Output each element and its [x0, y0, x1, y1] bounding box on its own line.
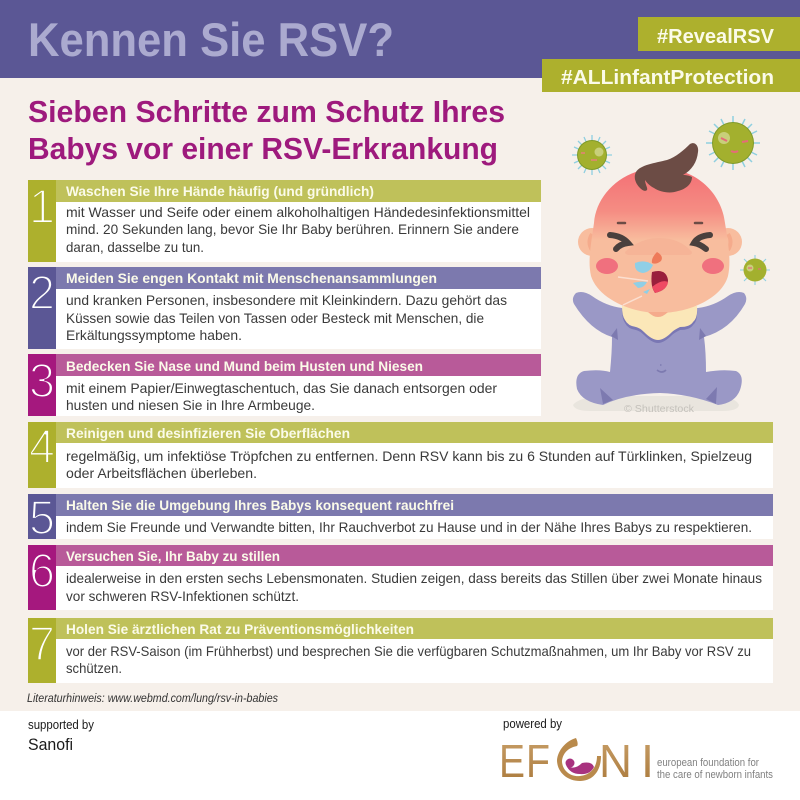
step 7: 7	[29, 618, 55, 671]
step 1: daran, dasselbe zu tun.	[66, 239, 204, 255]
step 2: Küssen sowie das Teilen von Tassen oder Besteck mit Menschen, die	[66, 310, 484, 326]
header band	[0, 0, 800, 78]
heading	[28, 94, 505, 166]
step 6: vor schweren RSV-Infektionen schützt.	[66, 588, 299, 604]
watermark: © Shutterstock	[624, 404, 695, 415]
step 3: mit einem Papier/Einwegtaschentuch, das Sie danach entsorgen oder	[66, 380, 497, 396]
step 5: indem Sie Freunde und Verwandte bitten, Ihr Rauchverbot zu Hause und in der Nähe Ihres Babys zu respektieren.	[66, 519, 752, 535]
collar	[622, 309, 697, 343]
EFCNI logo	[499, 735, 773, 787]
step 1: mit Wasser und Seife oder einem alkoholhaltigen Händedesinfektionsmittel	[66, 204, 530, 220]
step 2: 2	[29, 267, 55, 320]
hashtag: RevealRSV	[638, 17, 800, 51]
step 6: Versuchen Sie, Ihr Baby zu stillen	[66, 548, 280, 564]
step 6: idealerweise in den ersten sechs Lebensmonaten. Studien zeigen, dass bereits das Stillen über zwei Monate hinaus	[66, 570, 762, 586]
eyes	[610, 235, 628, 249]
arms and body	[573, 292, 746, 405]
head	[590, 168, 729, 313]
EFCNI logo: F	[526, 735, 550, 787]
nose	[652, 252, 662, 264]
step 6: 6	[29, 545, 55, 598]
step 4: regelmäßig, um infektiöse Tröpfchen zu entfernen. Denn RSV kann bis zu 6 Stunden auf Türklinken, Spielzeug	[66, 448, 752, 464]
supported by Sanofi: supported by	[28, 718, 95, 732]
EFCNI logo: I	[641, 735, 654, 787]
hashtag: ALLinfantProtection	[542, 59, 800, 92]
hashtag: ALLinfantProtection: #ALLinfantProtection	[561, 67, 774, 89]
hair	[635, 143, 698, 192]
step 5: 5	[29, 492, 55, 545]
supported by Sanofi	[28, 718, 95, 754]
mucus	[635, 261, 653, 273]
step 1: mind. 20 Sekunden lang, bevor Sie Ihr Baby berühren. Erinnern Sie andere	[66, 221, 519, 237]
step 5: Halten Sie die Umgebung Ihres Babys konsequent rauchfrei	[66, 497, 454, 513]
EFCNI logo: the care of newborn infants	[657, 769, 773, 781]
step 7: vor der RSV-Saison (im Frühherbst) und besprechen Sie die verfügbaren Schutzmaßnahmen, um Ihr Baby vor RSV zu	[66, 643, 751, 659]
step 5	[28, 492, 773, 545]
step 3: husten und niesen Sie in Ihre Armbeuge.	[66, 397, 315, 413]
EFCNI logo: N	[599, 735, 632, 787]
virus left	[572, 135, 612, 175]
cheeks	[596, 258, 618, 274]
step 7	[28, 618, 773, 683]
ears	[578, 228, 606, 256]
step 4: oder Arbeitsflächen überleben.	[66, 465, 257, 481]
virus lower right	[740, 255, 770, 285]
step 2: Erkältungssymptome haben.	[66, 327, 242, 343]
powered by: powered by	[503, 717, 563, 731]
step 2	[28, 267, 541, 349]
EFCNI logo: european foundation for	[657, 757, 759, 769]
illustration: sneezing baby	[572, 116, 770, 415]
step 3	[28, 354, 541, 416]
step 4: Reinigen und desinfizieren Sie Oberflächen	[66, 425, 350, 441]
step 2: Meiden Sie engen Kontakt mit Menschenansammlungen	[66, 270, 437, 286]
step 3: 3	[29, 355, 55, 408]
step 2: und kranken Personen, insbesondere mit Kleinkindern. Dazu gehört das	[66, 292, 507, 308]
step 1	[28, 180, 541, 262]
supported by Sanofi: Sanofi	[28, 735, 73, 754]
EFCNI logo: E	[499, 735, 525, 787]
virus top right	[706, 116, 760, 170]
step 6	[28, 545, 773, 610]
heading: Babys vor einer RSV-Erkrankung	[28, 131, 498, 166]
step 4	[28, 421, 773, 488]
brows	[618, 222, 702, 224]
shadow	[573, 396, 739, 411]
mouth	[651, 271, 668, 293]
step 4: 4	[29, 421, 55, 474]
step 1: Waschen Sie Ihre Hände häufig (und gründlich)	[66, 183, 374, 199]
title: Kennen Sie RSV?	[28, 13, 394, 66]
step 1: 1	[29, 181, 55, 234]
heading: Sieben Schritte zum Schutz Ihres	[28, 94, 505, 129]
reference note: Literaturhinweis: www.webmd.com/lung/rsv-in-babies	[27, 693, 278, 705]
hashtag: RevealRSV: #RevealRSV	[657, 26, 775, 48]
step 7: schützen.	[66, 660, 122, 676]
step 7: Holen Sie ärztlichen Rat zu Präventionsmöglichkeiten	[66, 621, 414, 637]
step 3: Bedecken Sie Nase und Mund beim Husten und Niesen	[66, 358, 423, 374]
